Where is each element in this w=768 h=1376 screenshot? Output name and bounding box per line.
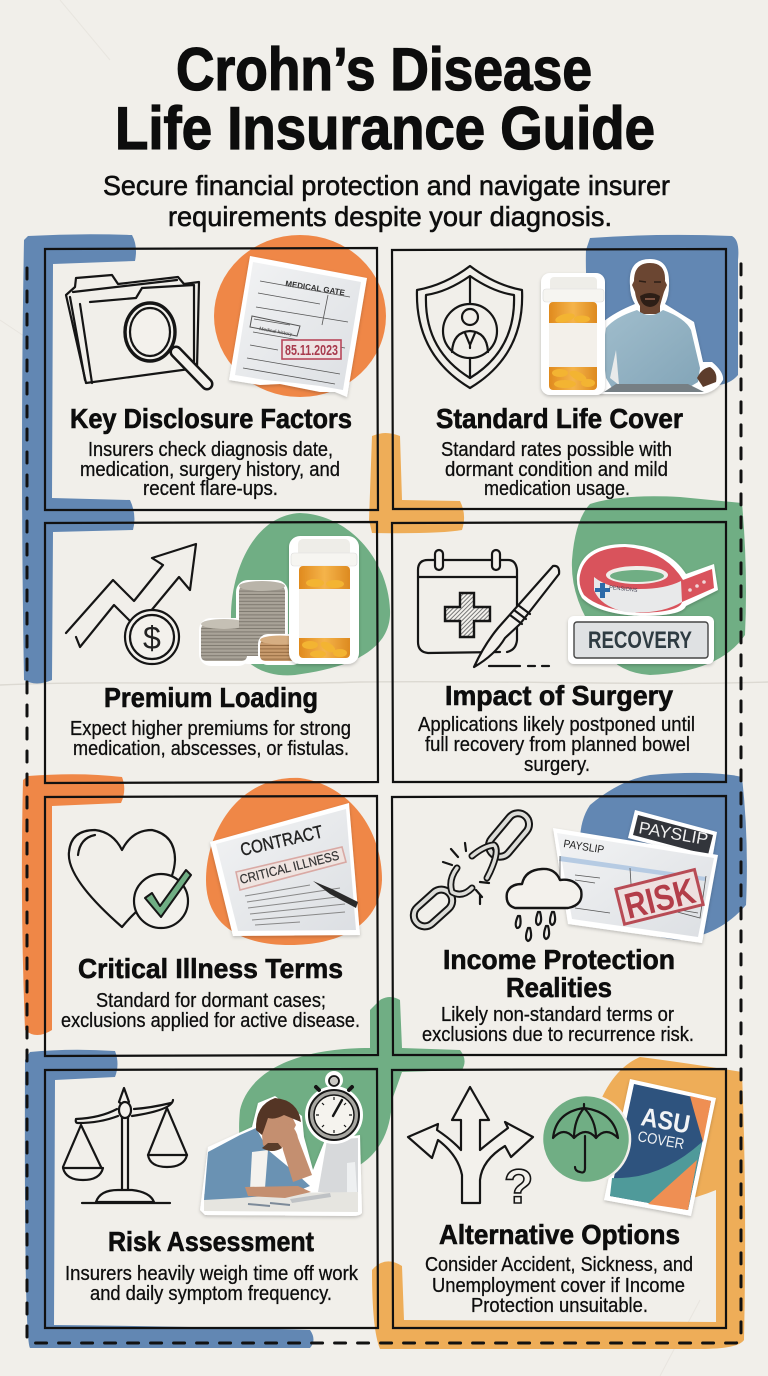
heading: Alternative Options: [439, 1219, 680, 1250]
description: recent flare-ups.: [143, 477, 278, 500]
subtitle: [103, 170, 670, 232]
title: [115, 36, 655, 162]
paint background blocks: [22, 234, 747, 1349]
risk stamp: RISK: [620, 870, 699, 927]
panel: impact of surgery: [392, 522, 726, 782]
date stamp: 85.11.2023: [285, 342, 338, 359]
description: and daily symptom frequency.: [90, 1282, 332, 1305]
payslip document: [553, 828, 718, 943]
subtitle: requirements despite your diagnosis.: [168, 201, 612, 232]
ASU cover booklet: ASU: [639, 1101, 692, 1139]
contract document: CRITICAL ILLNESS: [238, 848, 341, 887]
panel: premium loading: [45, 522, 378, 783]
icon: rising arrow and dollar coin: [66, 544, 196, 664]
panel: risk assessment: [45, 1069, 378, 1328]
description: dormant condition and mild: [445, 458, 668, 481]
title: Life Insurance Guide: [115, 95, 655, 162]
description: Unemployment cover if Income: [432, 1274, 685, 1297]
panel: alternative options: [392, 1069, 726, 1328]
description: Consider Accident, Sickness, and: [425, 1253, 693, 1276]
icon: umbrella in green circle: [542, 1095, 630, 1183]
description: Protection unsuitable.: [471, 1294, 648, 1317]
description: [425, 1253, 693, 1317]
panel: critical illness terms: [45, 796, 378, 1056]
payslip tag: [628, 810, 717, 860]
description: full recovery from planned bowel: [425, 733, 690, 756]
heading: Realities: [506, 972, 612, 1003]
medical document: MEDICAL GATE: [285, 279, 346, 297]
description: Expect higher premiums for strong: [70, 717, 351, 740]
description: Likely non-standard terms or: [441, 1003, 674, 1026]
icon: rising arrow and dollar coin: $: [143, 620, 161, 656]
description: Insurers heavily weigh time off work: [65, 1262, 359, 1285]
description: [70, 717, 351, 760]
stressed man at computer: [200, 1096, 362, 1216]
recovery plate: [568, 616, 714, 664]
icon: balance scales: [63, 1088, 187, 1203]
pill bottle: [289, 536, 359, 664]
recovery plate: RECOVERY: [588, 627, 692, 654]
description: [422, 1003, 694, 1046]
description: medication, abscesses, or fistulas.: [73, 737, 349, 760]
hospital wristband: PENSIONS: [609, 585, 638, 594]
icon: calendar and scalpel: [418, 550, 559, 667]
contract document: CONTRACT: [238, 822, 325, 860]
icon: diverging arrows: ?: [504, 1161, 533, 1214]
heading: Risk Assessment: [108, 1226, 314, 1257]
description: Standard rates possible with: [441, 438, 672, 461]
description: [61, 989, 360, 1032]
meditating man: [599, 259, 723, 394]
heading: [443, 944, 675, 1003]
description: exclusions applied for active disease.: [61, 1009, 360, 1032]
coin stacks: [199, 580, 302, 666]
description: Insurers check diagnosis date,: [88, 438, 333, 461]
title: Crohn’s Disease: [176, 36, 592, 103]
icon: diverging arrows: [408, 1087, 533, 1214]
ASU cover booklet: [604, 1079, 716, 1216]
contract document: [210, 803, 360, 936]
description: surgery.: [524, 753, 590, 776]
panel: income protection realities: [392, 796, 726, 1055]
icon: heart with check: [69, 830, 191, 928]
panel: key disclosure factors: [45, 248, 378, 510]
medical document: Medical history: [259, 326, 293, 338]
heading: Standard Life Cover: [436, 403, 683, 434]
description: Applications likely postponed until: [418, 713, 695, 736]
description: medication, surgery history, and: [80, 458, 340, 481]
heading: Premium Loading: [104, 682, 318, 713]
pill bottle: [541, 273, 605, 395]
outer dashed frame: [27, 252, 741, 1343]
medical document: [229, 256, 367, 397]
description: [80, 438, 340, 500]
heading: Critical Illness Terms: [78, 953, 343, 984]
icon: broken chain: [409, 809, 533, 931]
heading: Key Disclosure Factors: [70, 403, 352, 434]
ASU cover booklet: COVER: [636, 1128, 686, 1153]
heading: Impact of Surgery: [445, 680, 674, 711]
subtitle: Secure financial protection and navigate insurer: [103, 170, 670, 201]
description: [441, 438, 672, 500]
panel: standard life cover: [392, 249, 726, 509]
payslip tag: PAYSLIP: [637, 818, 710, 849]
date stamp: [282, 340, 341, 359]
description: [65, 1262, 359, 1305]
stopwatch: [305, 1071, 363, 1144]
payslip document: PAYSLIP: [563, 838, 605, 856]
heading: Income Protection: [443, 944, 675, 975]
icon: folder with magnifier: [66, 275, 207, 384]
description: Standard for dormant cases;: [96, 989, 326, 1012]
icon: shield: [417, 266, 522, 388]
description: medication usage.: [484, 477, 630, 500]
icon: rain cloud: [507, 869, 581, 941]
description: exclusions due to recurrence risk.: [422, 1023, 694, 1046]
hospital wristband: [577, 544, 718, 616]
description: [418, 713, 695, 776]
